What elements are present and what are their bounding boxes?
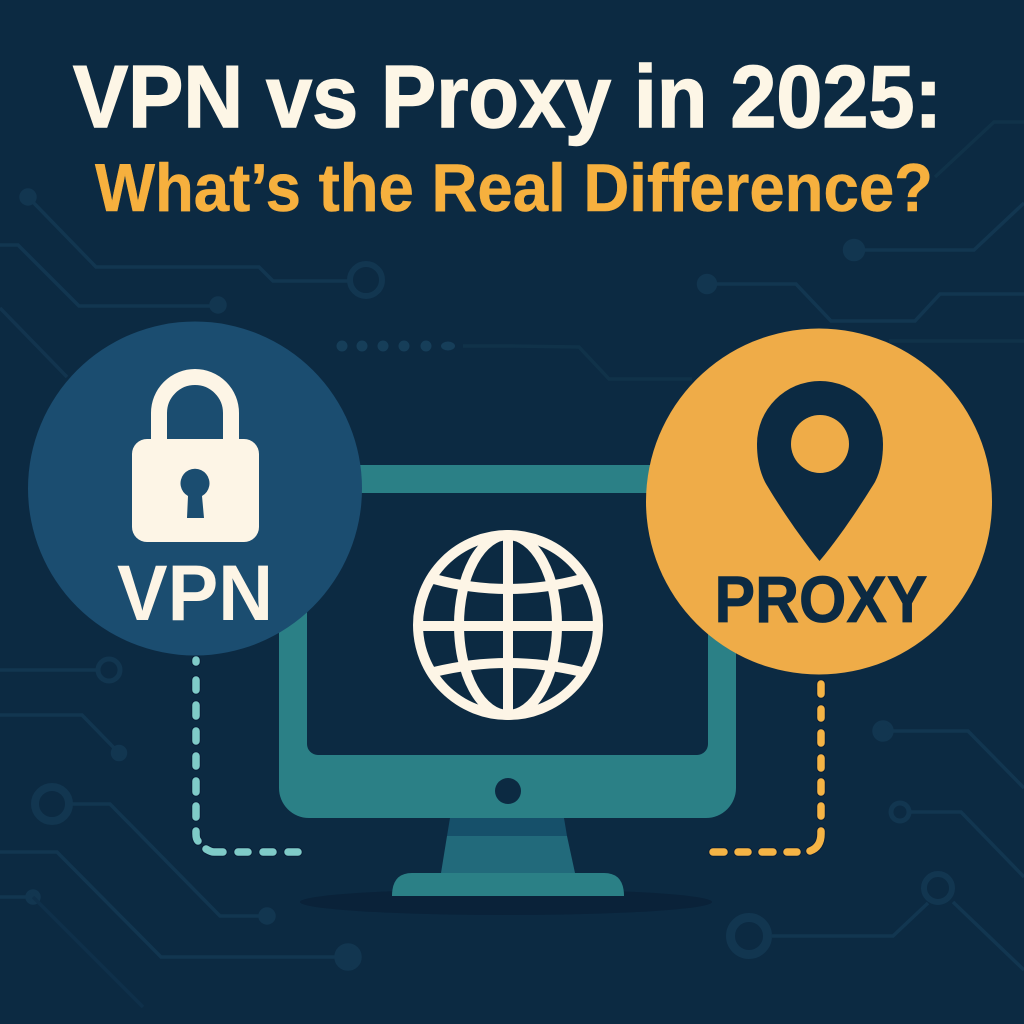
connector: proxy: [713, 684, 821, 852]
VPN label: VPN: [117, 548, 273, 637]
monitor: [279, 465, 736, 896]
shadow: [300, 889, 712, 915]
panel: proxy: [646, 328, 992, 674]
icon: globe: [418, 535, 598, 715]
connector: VPN: [196, 660, 298, 852]
icon: padlock: [132, 377, 259, 542]
title: VPN vs Proxy in 2025:: [73, 47, 942, 146]
panel: VPN: [28, 322, 362, 656]
icon: location pin: [757, 381, 883, 561]
proxy label: PROXY: [714, 562, 928, 636]
subtitle: What’s the Real Difference?: [95, 150, 933, 226]
